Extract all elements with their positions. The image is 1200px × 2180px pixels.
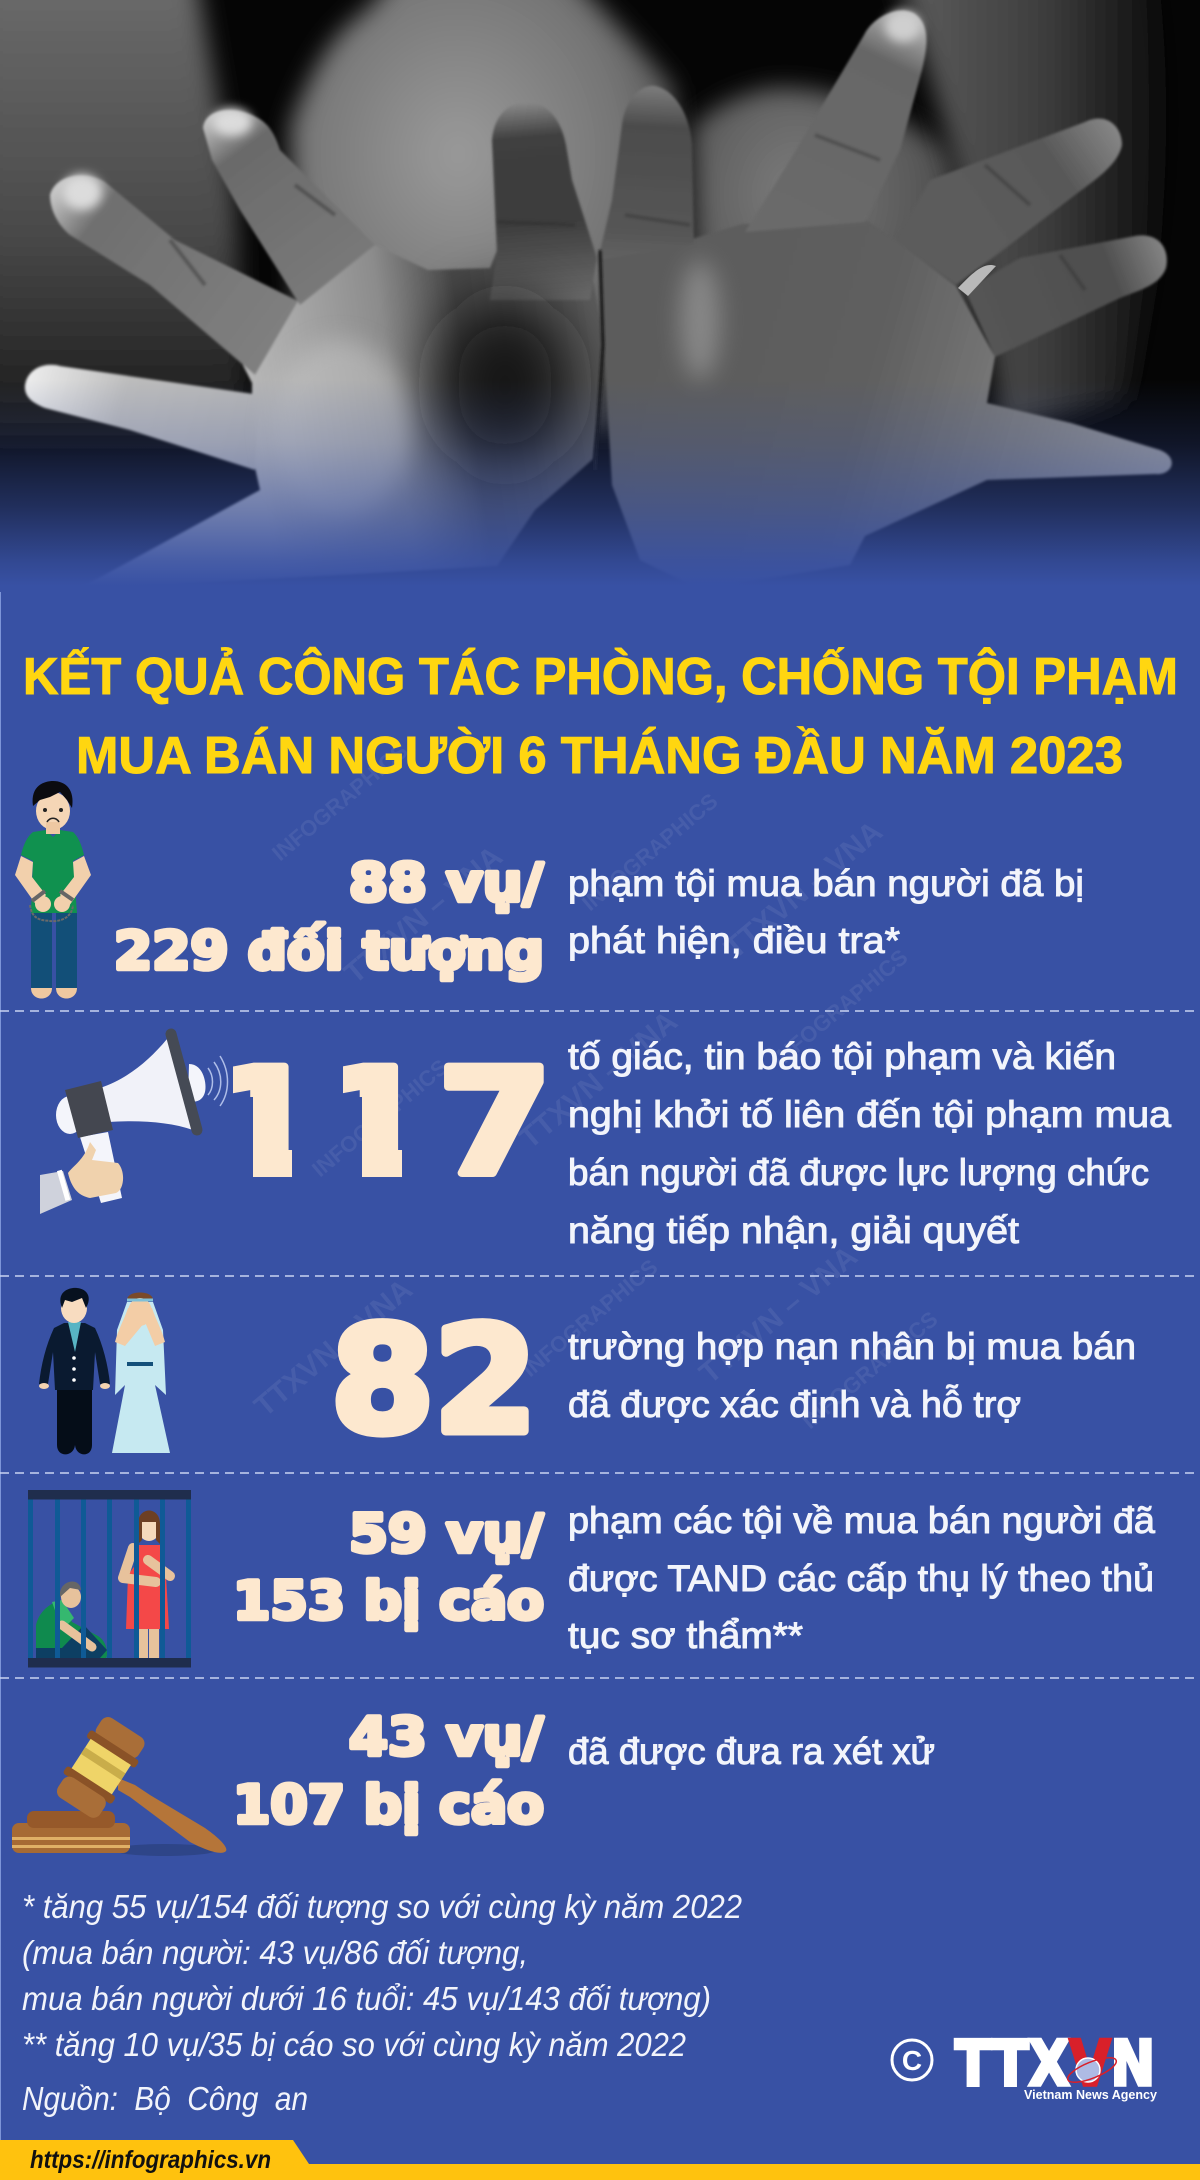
footer bar with URL: https://infographics.vn [30,2146,271,2174]
watermarks: TTXVN – VNA [248,1273,419,1423]
watermarks: INFOGRAPHICS [307,1054,452,1182]
row 2: 117 reports [40,1034,1171,1251]
description 2: nghị khởi tố liên đến tội phạm mua [568,1094,1171,1135]
footnotes: (mua bán người: 43 vụ/86 đối tượng, [22,1934,528,1971]
left hand [25,102,604,590]
stat: 117: 117 [208,1037,552,1208]
row dividers [0,1011,1200,1678]
stat: 43 vụ / 107 bị cáo: 107 bị cáo [233,1775,544,1836]
description 1: phát hiện, điều tra* [568,920,900,961]
watermarks: INFOGRAPHICS [517,1254,662,1382]
footnotes: ** tăng 10 vụ/35 bị cáo so với cùng kỳ năm 2022 [22,2026,686,2063]
logo: TTXVN: TTXVN [955,2027,1155,2100]
description 2: bán người đã được lực lượng chức [568,1152,1149,1193]
description 2: tố giác, tin báo tội phạm và kiến [568,1036,1116,1077]
footnotes: mua bán người dưới 16 tuổi: 45 vụ/143 đối tượng) [22,1980,711,2017]
description 2: năng tiếp nhận, giải quyết [568,1210,1020,1251]
description 3: trường hợp nạn nhân bị mua bán [568,1326,1136,1367]
footnotes: * tăng 55 vụ/154 đối tượng so với cùng kỳ năm 2022 [22,1888,742,1925]
watermarks: INFOGRAPHICS [577,788,722,916]
stat: 88 vụ / 229 đối tượng: 229 đối tượng [114,921,544,982]
stat: 43 vụ / 107 bị cáo: 43 vụ/ [349,1707,544,1768]
watermarks: TTXVN – VNA [338,840,509,990]
stat: 82: 82 [331,1296,537,1466]
stat: 59 vụ / 153 bị cáo: 153 bị cáo [233,1571,544,1632]
row 3: 82 victims [39,1288,1136,1466]
logo: TTXVN: C [902,2045,922,2076]
description 3: đã được xác định và hỗ trợ [568,1384,1021,1425]
watermarks: INFOGRAPHICS [767,944,912,1072]
icon: groom and crying bride [39,1288,170,1454]
icon: people behind bars [28,1490,191,1668]
description 4 [568,1500,1155,1656]
stat: 43 vụ / 107 bị cáo [233,1707,544,1836]
watermarks: TTXVN – VNA [693,1240,864,1390]
description 1 [568,863,1084,961]
icon: handcuffed man [15,781,91,998]
description 1: phạm tội mua bán người đã bị [568,863,1084,904]
description 5: đã được đưa ra xét xử [568,1731,935,1772]
watermarks: INFOGRAPHICS [267,738,412,866]
row 4: 59 cases [28,1490,1155,1668]
watermarks: TTXVN – VNA [513,1005,684,1155]
logo: TTXVN: Vietnam News Agency [1024,2088,1157,2102]
row 1: 88 cases [15,781,1084,998]
photo: outstretched hands fading into blue [0,0,1200,592]
description 4: phạm các tội về mua bán người đã [568,1500,1155,1541]
footnotes [22,1888,742,2117]
watermarks: TTXVN – VNA [718,815,889,965]
stat: 59 vụ / 153 bị cáo [233,1504,544,1632]
footer bar with URL [0,2140,1200,2180]
description 4: được TAND các cấp thụ lý theo thủ [568,1558,1154,1599]
right hand [598,11,1172,590]
icon: gavel [12,1712,226,1856]
description 2 [568,1036,1171,1251]
stat: 59 vụ / 153 bị cáo: 59 vụ/ [349,1504,544,1565]
title [23,647,1178,785]
watermarks: INFOGRAPHICS [797,1306,942,1434]
stat: 88 vụ / 229 đối tượng [114,853,544,982]
icon: megaphone in hand [40,1034,228,1214]
description 4: tục sơ thẩm** [568,1615,803,1656]
watermarks [248,738,942,1434]
description 3 [568,1326,1136,1425]
row 5: 43 cases [12,1707,935,1856]
footnotes: Nguồn: Bộ Công an [22,2080,308,2117]
stat: 88 vụ / 229 đối tượng: 88 vụ/ [349,853,544,914]
title: MUA BÁN NGƯỜI 6 THÁNG ĐẦU NĂM 2023 [76,726,1123,785]
